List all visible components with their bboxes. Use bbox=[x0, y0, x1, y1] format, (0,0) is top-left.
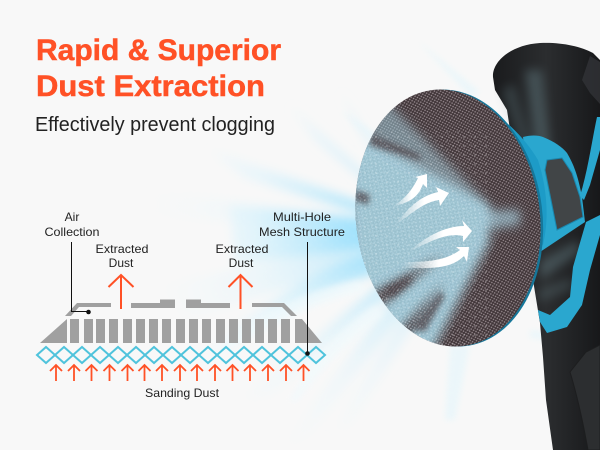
diagram labels: Dust bbox=[109, 256, 134, 270]
title: Rapid & Superior bbox=[36, 34, 281, 67]
small dust arrows bbox=[50, 365, 310, 381]
dust streaks on disc bbox=[350, 100, 520, 350]
mesh leader bbox=[305, 242, 310, 356]
upper cover plates bbox=[65, 300, 297, 316]
blue rubber bracket bbox=[476, 102, 600, 333]
extracted dust arrow right bbox=[228, 275, 252, 309]
diagram labels: Extracted bbox=[96, 242, 148, 256]
diagram labels: Dust bbox=[229, 256, 254, 270]
white airflow arrows on disc bbox=[392, 174, 472, 268]
extracted dust arrow left bbox=[108, 275, 134, 309]
diagram labels: Mesh Structure bbox=[259, 225, 345, 239]
subtitle: Effectively prevent clogging bbox=[35, 114, 275, 136]
mesh diamonds bbox=[37, 347, 325, 363]
filter bars bbox=[40, 319, 322, 343]
right strap bbox=[580, 117, 600, 200]
diagram labels: Collection bbox=[44, 225, 100, 239]
title bbox=[36, 34, 281, 103]
power tool body bbox=[493, 43, 600, 450]
lower grip panel bbox=[570, 345, 600, 450]
diagram labels: Sanding Dust bbox=[145, 386, 220, 400]
title: Dust Extraction bbox=[36, 70, 265, 103]
diagram: dust extraction cross-section bbox=[37, 210, 345, 400]
airflow streaks behind disc bbox=[145, 40, 600, 450]
diagram labels: Air bbox=[65, 210, 79, 224]
air collection leader bbox=[72, 242, 91, 314]
diagram labels bbox=[44, 210, 345, 400]
bracket upper panel bbox=[523, 136, 585, 252]
disc backing strip bbox=[476, 102, 547, 245]
lower strap bbox=[538, 215, 600, 333]
diagram labels: Multi-Hole bbox=[273, 210, 331, 224]
bracket window bbox=[545, 158, 583, 230]
sanding disc bbox=[355, 90, 544, 346]
diagram labels: Extracted bbox=[216, 242, 268, 256]
